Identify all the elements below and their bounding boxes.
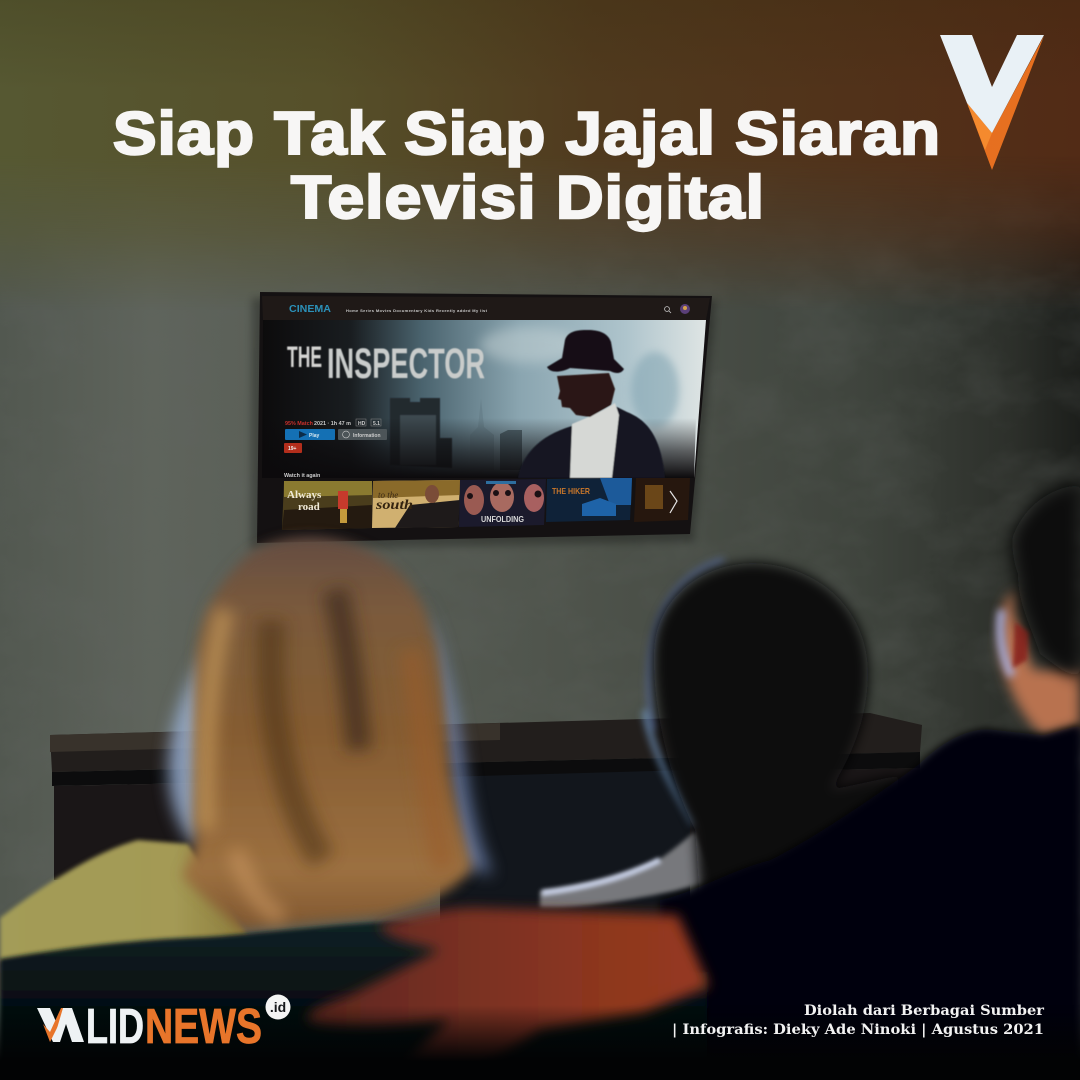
tv info and buttons: Watch it again <box>284 473 320 479</box>
tv search and avatar icons <box>665 304 690 314</box>
tv show title: INSPECTOR <box>327 340 485 388</box>
tv info and buttons: Information <box>353 433 380 439</box>
woman's yellow shoulder <box>0 840 248 962</box>
title: Siap Tak Siap Jajal Siaran <box>113 100 941 167</box>
title: Televisi Digital <box>291 164 765 231</box>
thumbnail: to the south: to the <box>378 490 398 500</box>
thumbnail: the hiker: THE HIKER <box>552 486 590 496</box>
tv info and buttons: Play <box>309 433 320 439</box>
tv thumbnail row <box>282 478 690 530</box>
tv top bar <box>262 296 710 320</box>
thumbnail: the hiker <box>546 478 632 522</box>
child's blue halo <box>649 560 724 730</box>
tv info and buttons <box>284 419 387 479</box>
thumbnail: always on the road: Always <box>287 489 322 501</box>
arm and hand around shoulders <box>307 908 709 1075</box>
credit text <box>672 1003 1045 1038</box>
tv info and buttons: 95% Match <box>285 421 313 427</box>
tv app name: CINEMA <box>289 303 331 315</box>
thumbnail: to the south <box>372 480 460 528</box>
thumbnail: to the south: south <box>375 498 413 513</box>
tv menu: Home Series Movies Documentary Kids Recently added My list <box>346 308 488 313</box>
tv screen hero <box>262 320 706 478</box>
tv info and buttons: HD <box>358 421 366 427</box>
logo: Validnews.id bottom left <box>37 994 290 1054</box>
tv info and buttons: 2021 · 1h 47 m <box>314 421 351 427</box>
city skyline <box>390 398 452 468</box>
sofa back <box>0 922 707 1080</box>
child's dark head <box>654 563 900 905</box>
logo id badge <box>266 994 290 1020</box>
thumbnail: unfolding: UNFOLDING <box>481 515 524 524</box>
thumbnail: always on the road: road <box>298 501 320 513</box>
thumbnail: always on the road <box>282 481 372 530</box>
television on the wall <box>250 292 716 550</box>
viewers on the sofa <box>0 484 1080 1080</box>
bottom shadow <box>0 1005 1080 1080</box>
logo VA mark <box>37 1008 84 1042</box>
thumbnail: unfolding <box>459 479 546 527</box>
thumbnail: partial with next arrow <box>634 478 690 522</box>
woman's long hair <box>182 537 472 930</box>
logo wordmark white: LID <box>86 1000 144 1054</box>
logo wordmark orange: NEWS <box>145 1000 262 1054</box>
woman's blue halo <box>169 600 493 875</box>
logo: Validnews.id bottom left: .id <box>270 999 286 1015</box>
tv info and buttons: 5.1 <box>373 421 380 427</box>
credit text: Diolah dari Berbagai Sumber <box>804 1003 1045 1019</box>
man in hat <box>518 330 665 478</box>
tv show title <box>287 340 485 388</box>
child's white shirt <box>540 831 715 907</box>
sideboard under the TV <box>50 713 922 950</box>
tv show title: THE <box>287 341 322 374</box>
logo: V mark top right <box>940 35 1044 170</box>
credit text: | Infografis: Dieky Ade Ninoki | Agustus 2021 <box>672 1022 1044 1038</box>
man's dark shoulders and torso <box>660 725 1080 1080</box>
title <box>113 100 941 231</box>
man's head and ear <box>1000 484 1080 735</box>
tv info and buttons: 19+ <box>288 446 297 452</box>
